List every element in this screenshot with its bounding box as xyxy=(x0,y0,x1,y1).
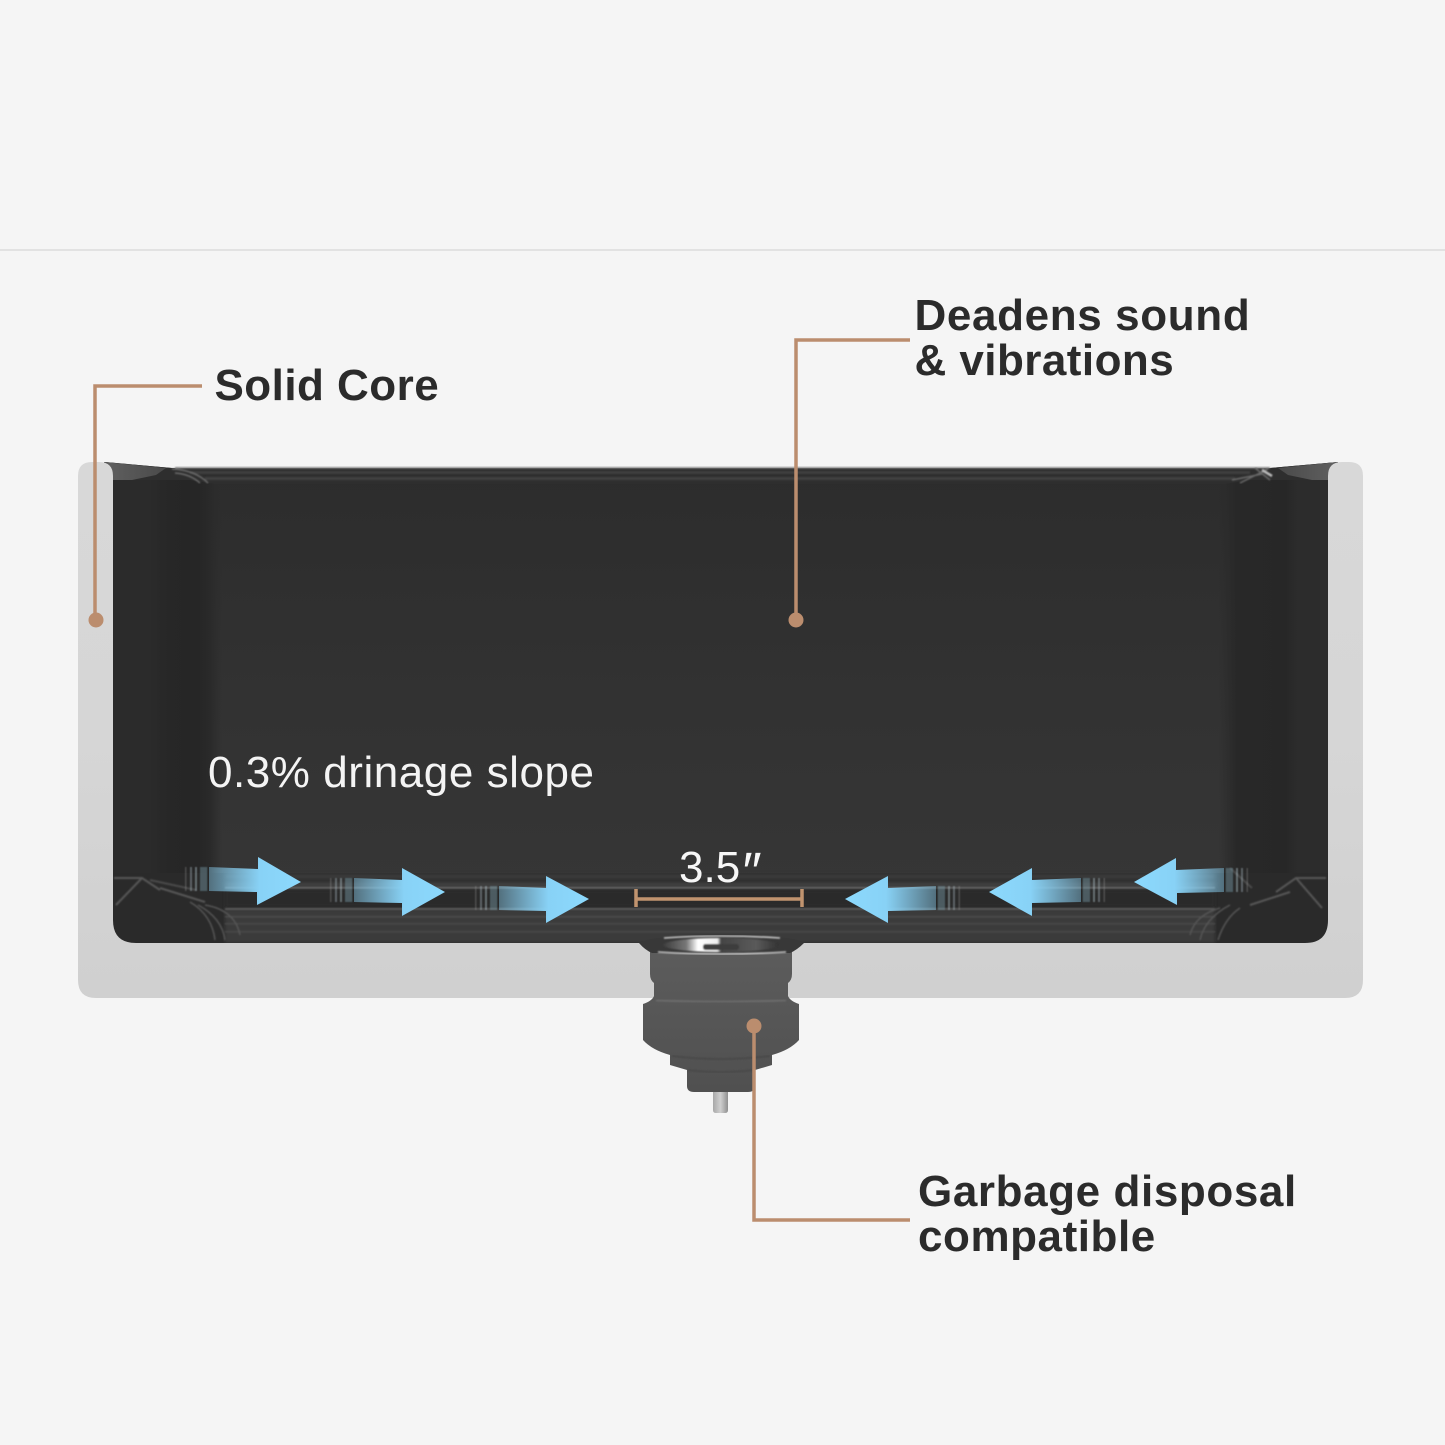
leader dot xyxy=(746,1018,762,1034)
drain width dimension xyxy=(636,842,802,907)
icon: garbage disposal drain xyxy=(639,936,804,1113)
drain flange xyxy=(639,937,804,953)
dimension label: 3.5 xyxy=(679,843,740,892)
disposal body xyxy=(643,952,799,1092)
label: compatible xyxy=(918,1212,1156,1261)
solid core sink wall xyxy=(78,462,1363,998)
dimension label: ″ xyxy=(740,842,761,902)
leader line xyxy=(95,386,202,620)
label: Deadens sound xyxy=(914,291,1250,340)
interior top ledge xyxy=(104,462,1338,484)
slope text: 0.3% drinage slope xyxy=(208,748,594,797)
arrows pointing to drain xyxy=(185,857,1248,923)
callout: garbage disposal xyxy=(746,1018,1297,1261)
label: Garbage disposal xyxy=(918,1167,1297,1216)
arrow 4 xyxy=(845,876,960,923)
sink cross-section xyxy=(78,462,1363,998)
label: Solid Core xyxy=(214,361,440,410)
disposal pin xyxy=(713,1092,728,1113)
interior bottom channel xyxy=(105,868,1338,943)
interior side shading xyxy=(113,478,1328,878)
leader dot xyxy=(788,612,804,628)
arrow 2 xyxy=(330,868,445,916)
top divider line xyxy=(0,249,1445,251)
arrow 6 xyxy=(1134,858,1248,905)
sink interior xyxy=(105,462,1338,943)
leader line xyxy=(754,1026,910,1220)
arrow 3 xyxy=(475,876,589,923)
leader dot xyxy=(88,612,104,628)
label: & vibrations xyxy=(914,336,1174,385)
dimension bracket xyxy=(636,889,802,907)
callout: deadens sound xyxy=(788,291,1250,628)
arrow 1 xyxy=(185,857,301,905)
leader line xyxy=(796,340,910,620)
callout: solid core xyxy=(88,361,440,628)
arrow 5 xyxy=(989,868,1105,916)
